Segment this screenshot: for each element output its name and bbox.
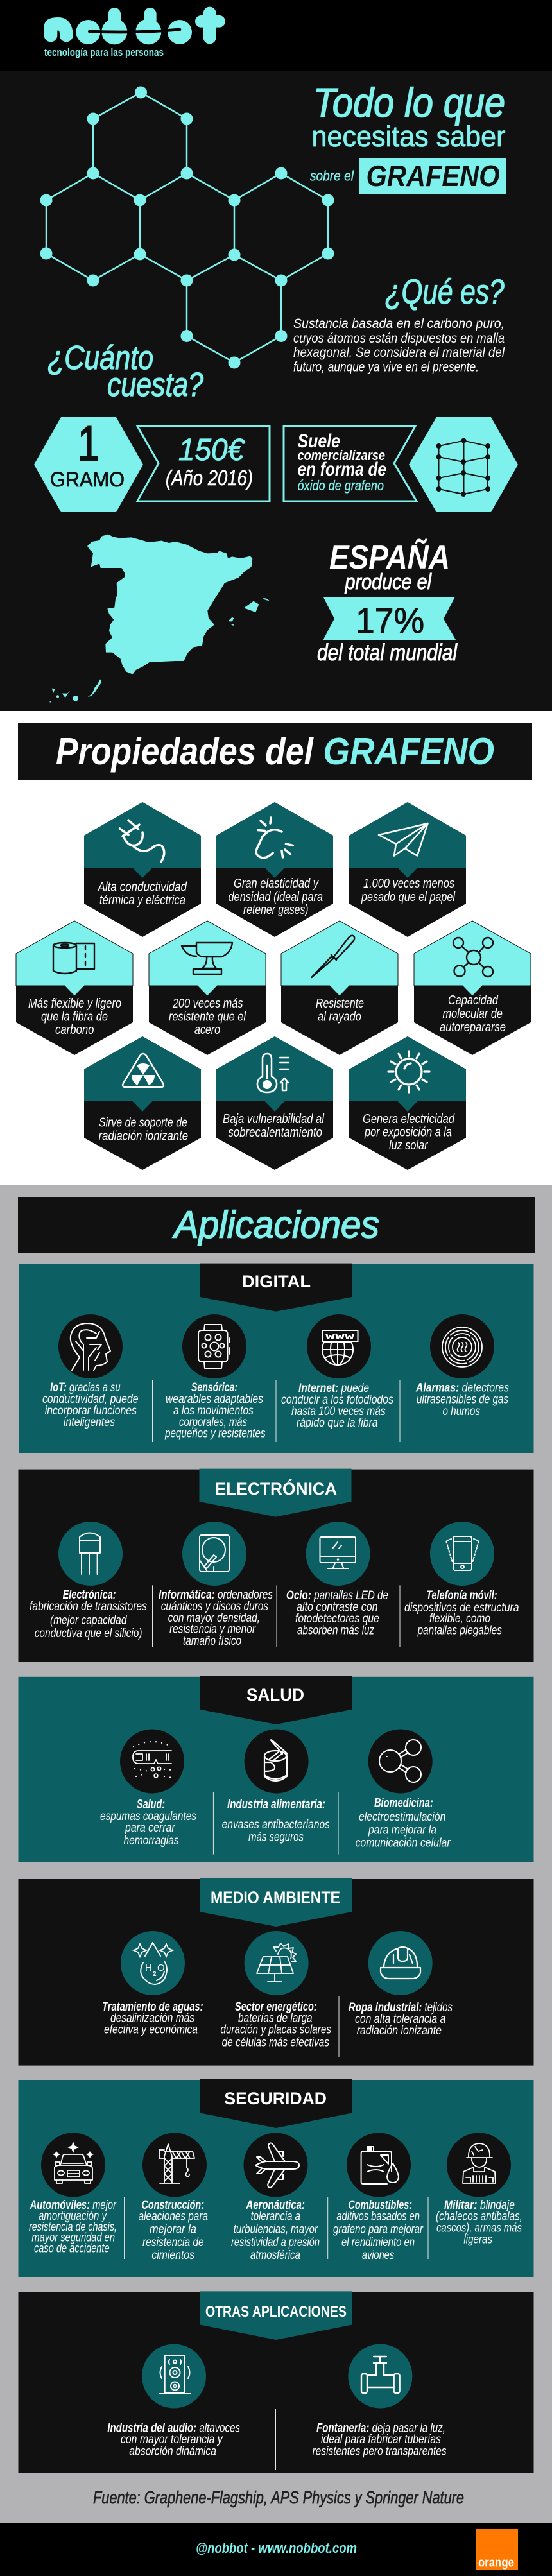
icon: anvil	[182, 943, 232, 974]
text: Automoviles: mayor seguridad en	[31, 2231, 115, 2244]
section header: seguridad: SEGURIDAD	[224, 2089, 327, 2108]
text: Sensórica	[164, 1381, 266, 1441]
text: Telefonia movil: dispositivos de estructura	[404, 1601, 519, 1615]
¿Qué es? block	[293, 273, 505, 375]
icon: www globe: WWW	[325, 1332, 355, 1343]
text: Telefonia movil: flexible, como	[429, 1612, 490, 1626]
text: Sector energetico: duración y placas solares	[220, 2023, 331, 2037]
ribbon: price: (Año 2016)	[166, 466, 253, 490]
text: Ropa industrial: con alta tolerancia a	[355, 2013, 445, 2026]
property: strength: acero	[194, 1023, 220, 1037]
property: radiation: Sirve de soporte de	[99, 1115, 187, 1129]
section header: salud: SALUD	[246, 1685, 304, 1704]
¿Cuánto cuesta? heading: ¿Cuánto	[47, 339, 153, 377]
text: Alarmas	[415, 1381, 509, 1418]
text: Automoviles: resistencia de chasis,	[29, 2220, 117, 2234]
property: conductivity	[84, 802, 201, 937]
panel: medio ambiente	[18, 1878, 534, 2066]
section header: digital	[200, 1264, 352, 1312]
logo: orange: orange	[478, 2556, 514, 2570]
text: Biomedicina: comunicación celular	[356, 1837, 451, 1850]
property: solar electricity: luz solar	[389, 1138, 429, 1153]
property: elasticity: retener gases)	[243, 903, 308, 917]
section header: medio ambiente: MEDIO AMBIENTE	[211, 1887, 340, 1907]
heading: Aplicaciones	[18, 1197, 535, 1253]
icon: IoT head	[58, 1314, 123, 1378]
panel: otras aplicaciones	[18, 2291, 534, 2473]
property: light weight	[349, 802, 466, 937]
text: Construccion: aleaciones para	[139, 2210, 208, 2223]
text: Ocio	[286, 1589, 388, 1638]
property: solar electricity: Genera electricidad	[363, 1112, 455, 1126]
icon: screwdriver	[312, 936, 354, 977]
text: Automoviles	[29, 2199, 117, 2256]
text: Alarmas: o humos	[443, 1405, 480, 1418]
text: Alarmas: ultrasensibles de gas	[417, 1393, 508, 1407]
text: Sensórica: a los movimientos	[173, 1404, 254, 1418]
text: Industria del audio	[107, 2422, 240, 2459]
icon: smart watch	[182, 1314, 246, 1378]
text: Internet: hasta 100 veces más	[291, 1405, 386, 1418]
property: conductivity: Alta conductividad	[98, 880, 187, 895]
panel: salud	[18, 1676, 534, 1862]
text: Combustibles: Combustibles:	[348, 2199, 412, 2212]
icon: flexible phone	[430, 1522, 494, 1586]
ribbon: commercial form: comercializarse	[298, 447, 385, 463]
icon: transistor	[58, 1522, 123, 1586]
text: Internet: Internet: puede	[298, 1382, 369, 1395]
section header: electronica	[199, 1469, 352, 1517]
title: GRAFENO	[366, 159, 500, 193]
Spain statistic: del total mundial	[317, 639, 458, 665]
text: Construccion: cimientos	[151, 2249, 194, 2262]
section header: digital: DIGITAL	[242, 1272, 311, 1291]
text: Electronica: Electrónica:	[63, 1588, 116, 1602]
text: Aeronautica: atmosférica	[250, 2249, 300, 2262]
icon: plug	[119, 820, 164, 862]
text: IoT: incorporar funciones	[45, 1404, 137, 1418]
property: scratch resistant: Resistente	[316, 997, 364, 1011]
icon: food can	[245, 1729, 309, 1793]
icon: broken link	[256, 818, 293, 858]
text: Ropa industrial: Ropa industrial: tejidos	[349, 2001, 453, 2014]
section header: medio ambiente	[200, 1878, 352, 1927]
text: Informatica: Informática: ordenadores	[159, 1588, 273, 1602]
ribbon: commercial form: en forma de	[298, 459, 386, 480]
text: Ropa industrial: radiación ionizante	[357, 2024, 442, 2038]
property: radiation	[84, 1036, 201, 1170]
text: Biomedicina: electroestimulación	[359, 1810, 445, 1824]
property: elasticity: densidad (ideal para	[229, 890, 323, 904]
text: Tratamiento de aguas: desalinización más	[110, 2012, 194, 2025]
text: Aeronautica: Aeronáutica:	[246, 2199, 305, 2212]
ribbon: price: 150€	[178, 433, 245, 467]
property: elasticity	[216, 802, 333, 937]
text: Salud: para cerrar	[125, 1821, 175, 1835]
tagline: tecnología para las personas	[44, 46, 164, 58]
property: overheating	[216, 1036, 333, 1170]
heading: Propiedades del grafeno: Propiedades del	[56, 730, 314, 773]
text: Industria alimentaria: Industria alimentaria:	[227, 1798, 325, 1812]
text: Militar	[436, 2199, 522, 2246]
text: Militar: ligeras	[463, 2233, 492, 2246]
property: conductivity: térmica y eléctrica	[99, 893, 185, 907]
heading: Aplicaciones: Aplicaciones	[173, 1203, 379, 1246]
text: Internet: conducir a los fotodiodos	[281, 1393, 393, 1407]
text: Biomedicina: para mejorar la	[368, 1823, 436, 1837]
text: Construccion: mejorar la	[150, 2223, 196, 2237]
icon: solar panel	[245, 1931, 309, 1995]
text: Fontaneria: ideal para fabricar tuberías	[321, 2433, 441, 2446]
text: Aeronautica: resistividad a presión	[231, 2236, 320, 2249]
property: self repair: autorepararse	[440, 1020, 506, 1035]
text: Fontaneria	[313, 2422, 447, 2459]
property: overheating: Baja vulnerabilidad al	[223, 1112, 324, 1126]
text: Industria del audio: Industria del audio: altavoces	[107, 2422, 240, 2435]
¿Qué es? block: futuro, aunque ya vive en el presente.	[293, 359, 479, 375]
text: Automoviles: Automóviles: mejor	[30, 2199, 117, 2212]
panel: seguridad	[18, 2079, 534, 2277]
property: flexibility: Más flexible y ligero	[28, 997, 121, 1011]
property: overheating: sobrecalentamiento	[229, 1126, 322, 1140]
property: radiation: radiación ionizante	[99, 1129, 188, 1144]
text: Combustibles: aditivos basados en	[336, 2210, 420, 2223]
text: Alarmas: Alarmas: detectores	[415, 1381, 509, 1395]
icon: alarm sensor	[430, 1314, 494, 1378]
text: Internet: rápido que la fibra	[297, 1416, 378, 1430]
¿Qué es? block: ¿Qué es?	[385, 273, 505, 311]
property: strength	[149, 921, 266, 1055]
hexagon: graphene oxide icon	[409, 417, 518, 512]
icon: molecule	[453, 938, 493, 977]
text: Informatica: tamaño físico	[183, 1635, 241, 1648]
property: scratch resistant	[281, 921, 398, 1055]
property: flexibility: carbono	[55, 1023, 94, 1037]
text: Tratamiento de aguas	[102, 2000, 203, 2037]
property: solar electricity: por exposición a la	[364, 1126, 452, 1140]
text: Salud: hemorragias	[123, 1834, 179, 1848]
title	[310, 80, 506, 194]
text: Automoviles: caso de accidente	[34, 2242, 110, 2256]
icon: radiation triangle	[123, 1054, 164, 1087]
section header: otras aplicaciones	[200, 2291, 352, 2340]
ribbon: commercial form	[284, 426, 417, 501]
section header: otras aplicaciones: OTRAS APLICACIONES	[205, 2303, 347, 2321]
text: Sector energetico: baterías de larga	[238, 2012, 313, 2025]
section header: salud	[200, 1676, 352, 1724]
text: Sensórica: wearables adaptables	[166, 1393, 263, 1406]
hexagon: 1 gramo: GRAMO	[50, 468, 125, 491]
property: flexibility: que la fibra de	[41, 1010, 108, 1024]
icon: molecule	[368, 1729, 433, 1793]
text: Ocio: absorben más luz	[297, 1624, 374, 1638]
text: Combustibles: aviones	[362, 2249, 394, 2262]
panel: digital	[19, 1264, 534, 1453]
text: Industria del audio: con mayor tolerancia y	[121, 2433, 223, 2446]
text: Aeronautica: tolerancia a	[251, 2210, 300, 2223]
text: Fontaneria: resistentes pero transparentes	[313, 2445, 447, 2459]
heading: Propiedades del grafeno: GRAFENO	[323, 730, 494, 773]
text: Telefonia movil: pantallas plegables	[417, 1624, 502, 1638]
icon: coagulant foam	[120, 1729, 184, 1793]
icon: thermometer	[257, 1054, 289, 1092]
text: Construccion: resistencia de	[142, 2236, 204, 2249]
text: Industria alimentaria: envases antibacterianos	[222, 1818, 330, 1832]
title: Todo lo que	[313, 80, 505, 126]
text: Combustibles: grafeno para mejorar	[333, 2223, 424, 2237]
text: Electronica: fabricación de transistores	[30, 1600, 147, 1613]
icon: hard disk	[182, 1522, 246, 1586]
property: scratch resistant: al rayado	[318, 1010, 361, 1024]
text: Combustibles: el rendimiento en	[341, 2236, 415, 2249]
text: Telefonia movil	[404, 1589, 519, 1638]
map of Spain	[49, 535, 270, 703]
¿Cuánto cuesta? heading	[47, 339, 203, 404]
logo: orange	[476, 2529, 518, 2570]
Spain statistic	[317, 538, 458, 665]
text: IoT: IoT: gracias a su	[50, 1381, 121, 1395]
property: strength: 200 veces más	[172, 997, 243, 1011]
property: self repair: Capacidad	[448, 993, 499, 1008]
property: self repair: molecular de	[443, 1007, 503, 1021]
icon: paper plane	[379, 823, 427, 856]
property: flexibility	[16, 921, 133, 1055]
heading: Propiedades del grafeno	[18, 723, 532, 780]
¿Qué es? block: cuyos átomos están dispuestos en malla	[293, 331, 505, 346]
icon: helmet	[368, 1931, 433, 1995]
property: self repair	[414, 921, 531, 1055]
text: Fontaneria: Fontanería: deja pasar la luz,	[316, 2422, 445, 2435]
icon: crane	[142, 2133, 207, 2197]
icon: fuel can	[347, 2133, 411, 2197]
text: Telefonia movil: Telefonía móvil:	[426, 1589, 497, 1602]
text: Ropa industrial	[349, 2001, 453, 2038]
text: Informatica: cuánticos y discos duros	[161, 1600, 268, 1613]
icon: monitor	[306, 1522, 370, 1586]
icon: soldier	[447, 2133, 511, 2197]
text: Sector energetico	[220, 2000, 331, 2050]
text: Militar: Militar: blindaje	[444, 2199, 515, 2212]
icon: water drop: 2	[153, 1971, 157, 1978]
text: IoT: inteligentes	[64, 1416, 115, 1429]
text: Salud: espumas coagulantes	[100, 1810, 196, 1823]
text: Militar: cascos), armas más	[436, 2222, 522, 2235]
text: Informatica: con mayor densidad,	[168, 1611, 260, 1625]
ribbon: price	[137, 426, 270, 501]
title: necesitas saber	[312, 120, 506, 153]
text: Sensórica: pequeños y resistentes	[164, 1427, 266, 1441]
footer credit: @nobbot - www.nobbot.com	[196, 2540, 357, 2556]
text: Electronica: conductiva que el silicio)	[35, 1627, 142, 1640]
text: Ocio: fotodetectores que	[295, 1612, 379, 1626]
hexagon: 1 gramo	[34, 416, 143, 512]
icon: www globe	[307, 1314, 371, 1378]
text: Construccion: Construcción:	[141, 2199, 204, 2212]
ribbon: commercial form: Suele	[298, 431, 340, 452]
section header: seguridad	[200, 2079, 352, 2128]
text: Automoviles: amortiguación y	[39, 2210, 107, 2223]
text: Combustibles	[333, 2199, 424, 2262]
text: Industria alimentaria: más seguros	[248, 1831, 304, 1844]
text: Electronica	[30, 1588, 147, 1640]
¿Cuánto cuesta? heading: cuesta?	[107, 366, 203, 404]
Spain statistic: 17%	[356, 600, 424, 640]
text: IoT: conductividad, puede	[42, 1393, 139, 1406]
text: IoT	[42, 1381, 139, 1429]
text: Sector energetico: Sector energético:	[235, 2000, 317, 2014]
text: Aeronautica	[231, 2199, 320, 2262]
text: Tratamiento de aguas: Tratamiento de aguas:	[102, 2000, 203, 2014]
text: Ocio: Ocio: pantallas LED de	[286, 1589, 388, 1602]
icon: sun	[388, 1051, 429, 1092]
text: Industria del audio: absorción dinámica	[129, 2445, 216, 2459]
logo: nobbot	[44, 13, 220, 58]
icon: water drop: O	[157, 1962, 165, 1973]
ribbon: commercial form: óxido de grafeno	[298, 477, 384, 494]
¿Qué es? block: Sustancia basada en el carbono puro,	[293, 316, 505, 331]
text: Informatica	[159, 1588, 273, 1648]
property: light weight: pesado que el papel	[361, 890, 455, 904]
section header: electronica: ELECTRÓNICA	[215, 1479, 337, 1498]
icon: water drop: H	[145, 1962, 152, 1973]
property: strength: resistente que el	[169, 1010, 246, 1024]
text: Biomedicina: Biomedicina:	[374, 1796, 433, 1810]
Spain statistic: ESPAÑA	[329, 538, 450, 576]
text: Aeronautica: turbulencias, mayor	[234, 2223, 318, 2237]
text: Salud: Salud:	[137, 1798, 165, 1812]
property: elasticity: Gran elasticidad y	[234, 877, 319, 891]
panel: electronica	[18, 1469, 534, 1662]
Spain statistic: produce el	[345, 570, 432, 594]
text: Sensórica: Sensórica:	[191, 1381, 237, 1395]
hexagon: 1 gramo: 1	[78, 416, 99, 471]
text: Militar: (chalecos antibalas,	[436, 2210, 522, 2223]
text: Construccion	[139, 2199, 208, 2262]
text: Ocio: alto contraste con	[297, 1601, 378, 1614]
text: Industria alimentaria	[222, 1798, 330, 1844]
graphene hexagon network	[40, 86, 334, 368]
¿Qué es? block: hexagonal. Se considera el material del	[293, 345, 505, 360]
text: Electronica: (mejor capacidad	[50, 1614, 128, 1627]
text: Internet	[281, 1382, 393, 1430]
title: sobre el	[310, 168, 354, 184]
icon: paper roll	[53, 943, 94, 974]
icon: speaker	[142, 2344, 206, 2408]
icon: airplane	[244, 2133, 308, 2197]
property: light weight: 1.000 veces menos	[363, 877, 454, 891]
property: solar electricity	[349, 1036, 466, 1170]
icon: car	[41, 2133, 105, 2197]
text: Sector energetico: de células más efectivas	[222, 2036, 329, 2050]
text: Salud	[100, 1798, 196, 1848]
icon: pipe	[348, 2344, 412, 2408]
text: Tratamiento de aguas: efectiva y económica	[104, 2023, 198, 2037]
text: Sensórica: corporales, más	[179, 1416, 247, 1429]
text: Informatica: resistencia y menor	[169, 1622, 256, 1636]
icon: water drop	[121, 1931, 185, 1995]
text: Biomedicina	[356, 1796, 451, 1850]
